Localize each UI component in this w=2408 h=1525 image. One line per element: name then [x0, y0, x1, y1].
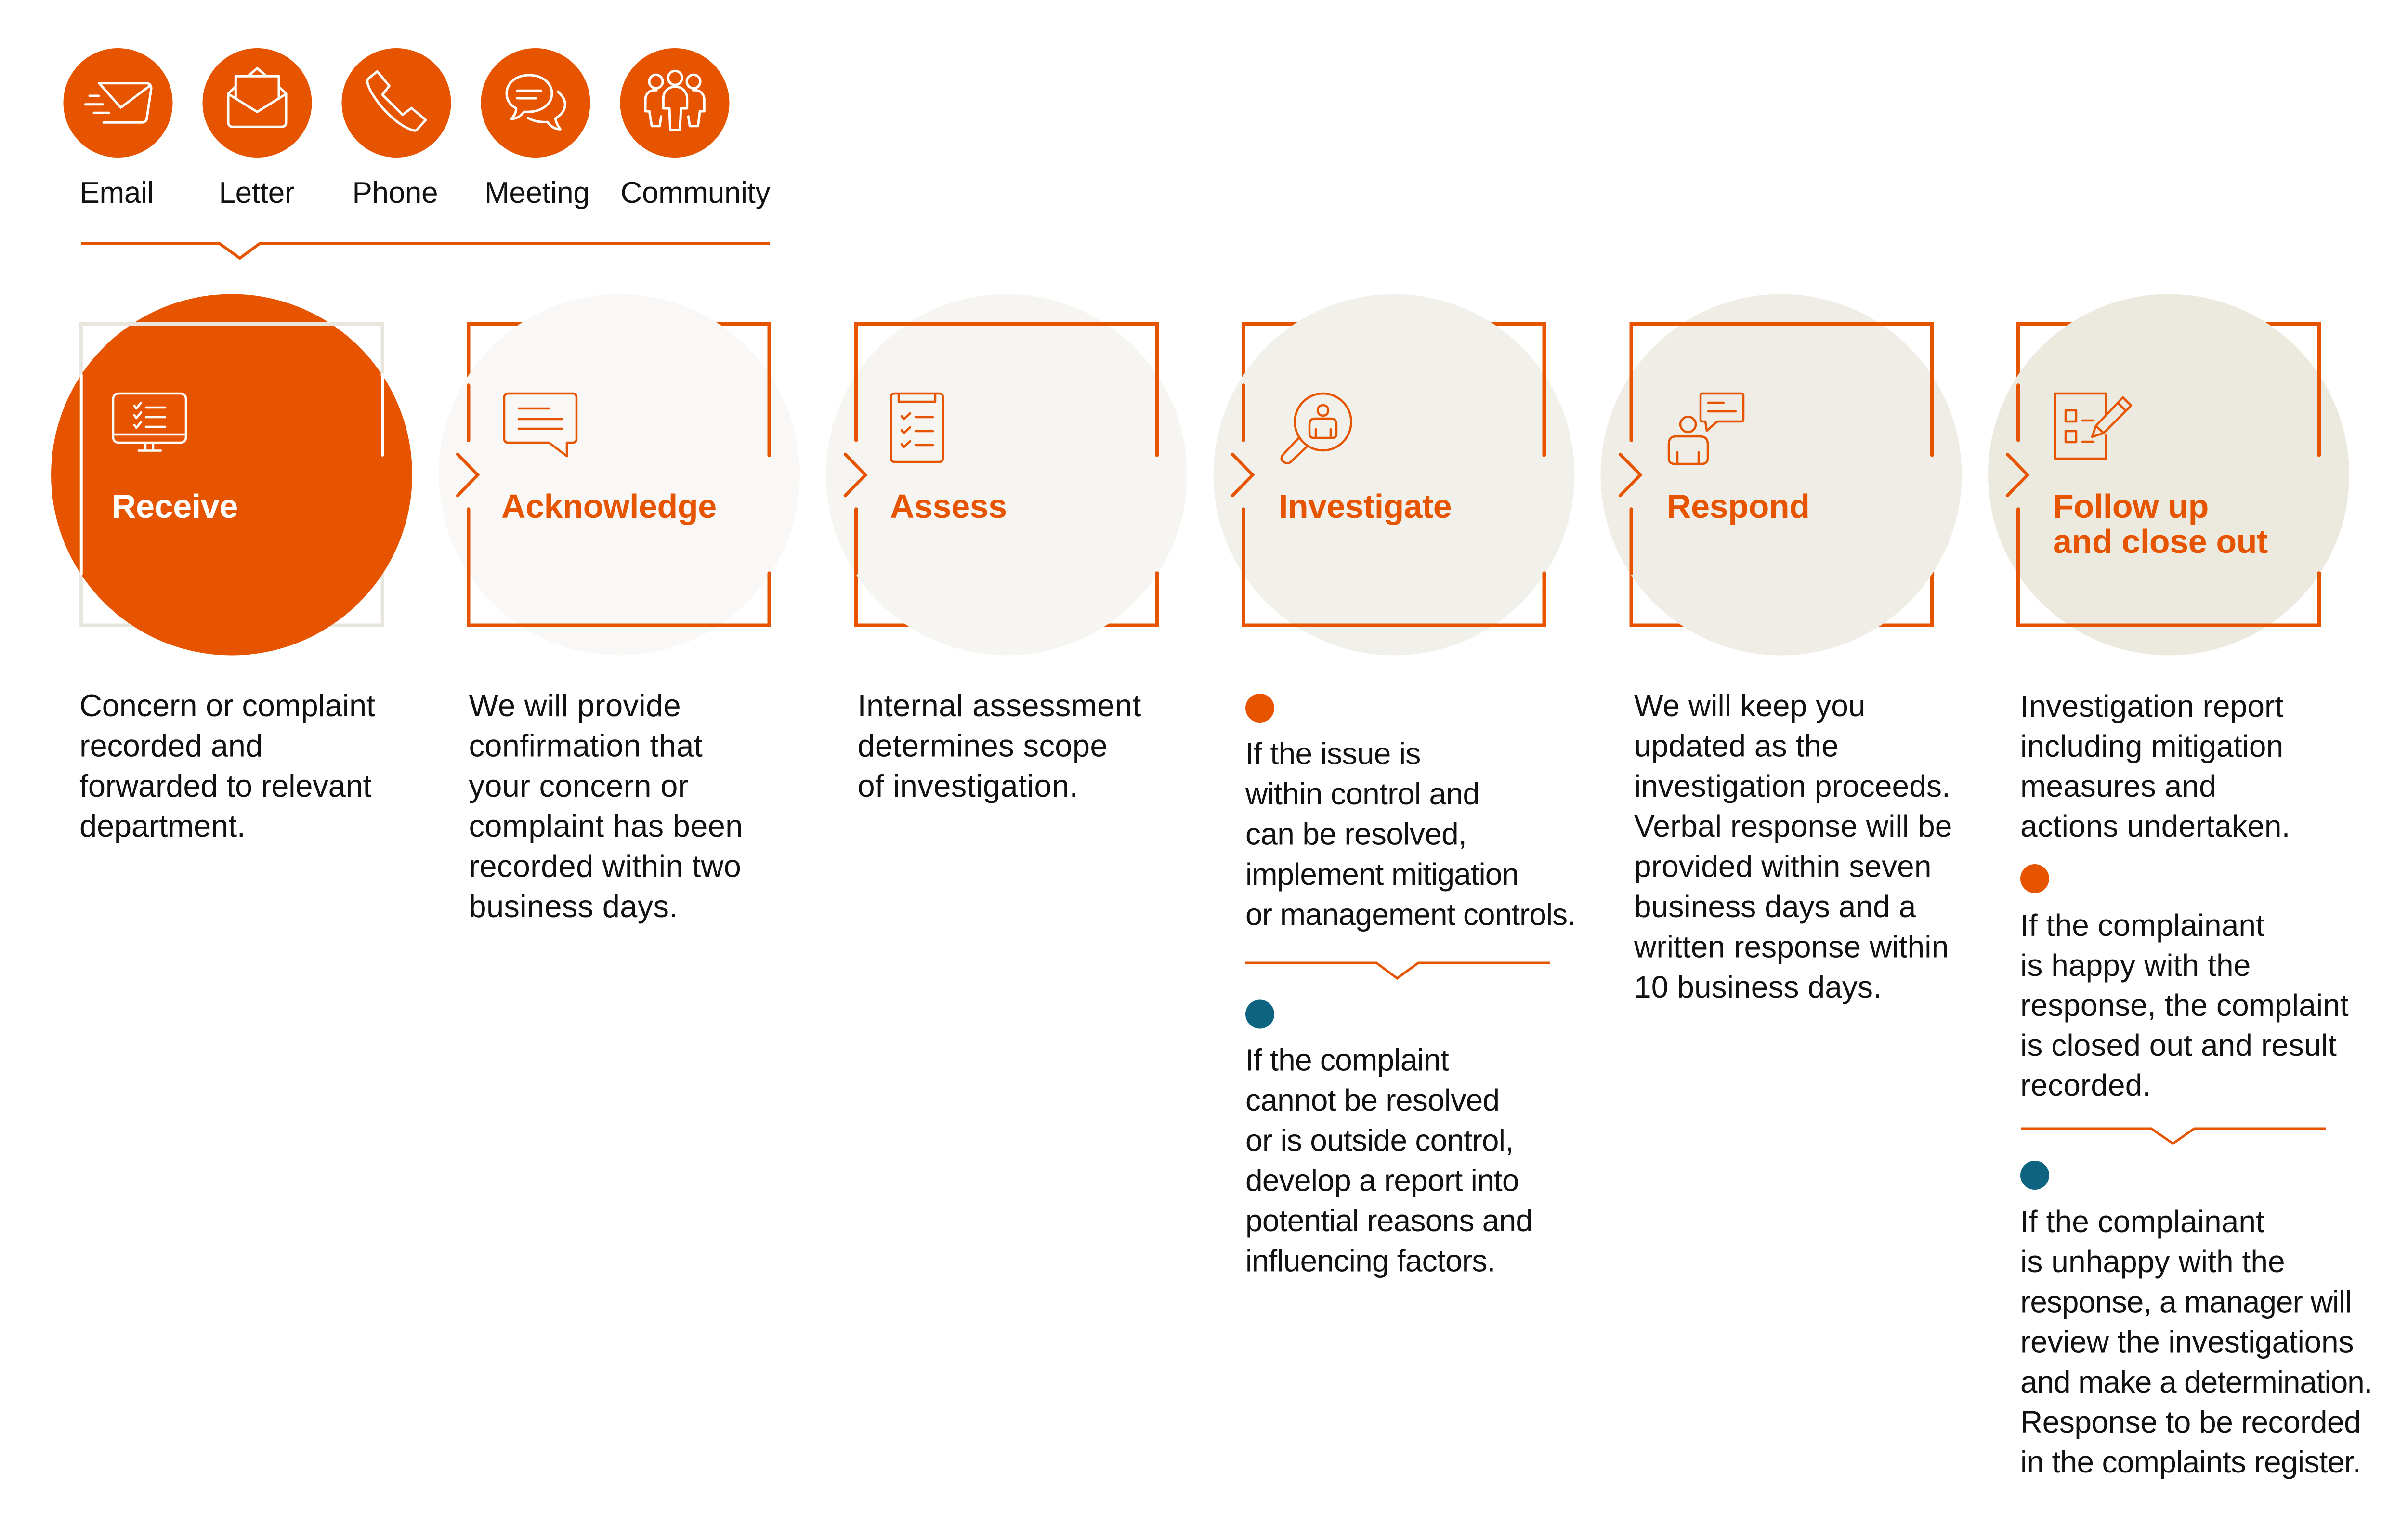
heading: receive: Receive — [112, 487, 238, 525]
dot: orange — [1245, 694, 1274, 723]
label: email: Email — [80, 176, 154, 210]
text: follow up intro: Investigation report — [2020, 689, 2283, 723]
text: acknowledge: confirmation that — [469, 728, 703, 763]
frame: investigate — [1243, 371, 1544, 625]
text: investigate branch 1 — [1245, 694, 1575, 932]
text: happy: If the complainant — [2020, 908, 2264, 943]
text: unhappy: and make a determination. — [2020, 1365, 2372, 1399]
panel: investigate — [1214, 294, 1575, 655]
icon: letter — [202, 48, 312, 158]
text: respond: investigation proceeds. — [1634, 769, 1950, 803]
heading: investigate: Investigate — [1279, 487, 1452, 525]
frame: follow up — [2018, 371, 2319, 625]
text: receive: department. — [79, 808, 246, 843]
icon: monitor checklist — [113, 394, 186, 451]
frame: respond — [1631, 324, 1932, 573]
text: resolved: within control and — [1245, 776, 1479, 811]
text: unresolved: or is outside control, — [1245, 1123, 1513, 1157]
icon: person with bubble — [1669, 394, 1743, 464]
heading: follow up: Follow up — [2053, 487, 2209, 525]
text: resolved: or management controls. — [1245, 897, 1575, 932]
text: respond: updated as the — [1634, 728, 1839, 763]
text: acknowledge: your concern or — [469, 768, 689, 803]
heading: acknowledge: Acknowledge — [501, 487, 717, 525]
frame: assess — [856, 324, 1157, 625]
icon: checklist and pencil — [2055, 394, 2131, 459]
text: respond: 10 business days. — [1634, 970, 1882, 1004]
text: follow up intro: actions undertaken. — [2020, 809, 2290, 843]
text: acknowledge: business days. — [469, 889, 678, 924]
arrow: investigate — [1232, 454, 1253, 496]
arrow: follow up — [2007, 454, 2028, 496]
divider: follow up — [2021, 1129, 2326, 1144]
text: happy: response, the complaint — [2020, 988, 2349, 1023]
text: investigate branch 2 — [1245, 1000, 1532, 1278]
text: follow up intro: measures and — [2020, 769, 2216, 803]
text: happy: is closed out and result — [2020, 1028, 2337, 1063]
label: phone: Phone — [353, 176, 438, 210]
text: resolved: If the issue is — [1245, 736, 1421, 771]
text: happy: is happy with the — [2020, 948, 2251, 983]
channels bracket — [81, 243, 770, 258]
text: unhappy: review the investigations — [2020, 1325, 2354, 1359]
heading: follow up: and close out — [2053, 523, 2268, 560]
dot: teal — [1245, 1000, 1274, 1029]
dot: orange — [2020, 864, 2049, 893]
circle: receive — [51, 294, 412, 655]
text: follow up branch 2 — [2020, 1161, 2372, 1479]
text: unresolved: develop a report into — [1245, 1163, 1519, 1198]
text: unresolved: influencing factors. — [1245, 1244, 1495, 1278]
icon: magnifier person — [1282, 394, 1351, 463]
text: unhappy: in the complaints register. — [2020, 1445, 2361, 1479]
text: assess: determines scope — [857, 728, 1108, 763]
text: respond: written response within — [1634, 929, 1949, 964]
label: letter: Letter — [219, 176, 294, 210]
circle: follow up — [1988, 294, 2349, 655]
dot: teal — [2020, 1161, 2049, 1190]
text: receive: Concern or complaint — [79, 688, 375, 723]
circle: acknowledge — [439, 294, 800, 655]
icon: speech bubble — [504, 394, 576, 456]
text: unhappy: Response to be recorded — [2020, 1405, 2361, 1439]
icon: community — [620, 48, 729, 158]
text: follow up intro: including mitigation — [2020, 729, 2283, 763]
text: unhappy: is unhappy with the — [2020, 1244, 2285, 1279]
text: respond: provided within seven — [1634, 849, 1932, 884]
text: assess: Internal assessment — [857, 688, 1141, 723]
text: acknowledge: recorded within two — [469, 849, 741, 884]
text: happy: recorded. — [2020, 1068, 2151, 1103]
label: community: Community — [620, 176, 771, 210]
text: unresolved: If the complaint — [1245, 1042, 1449, 1077]
text: respond: business days and a — [1634, 889, 1916, 924]
text: respond: We will keep you — [1634, 688, 1866, 723]
divider: investigate — [1245, 963, 1550, 978]
text: receive: recorded and — [79, 728, 263, 763]
heading: respond: Respond — [1667, 487, 1810, 525]
text: assess: of investigation. — [857, 768, 1078, 803]
panel: respond — [1601, 294, 1962, 655]
text: respond: Verbal response will be — [1634, 809, 1952, 843]
text: resolved: implement mitigation — [1245, 857, 1518, 892]
panel: acknowledge — [439, 294, 800, 655]
channels row — [64, 48, 771, 258]
arrow: respond — [1620, 454, 1640, 496]
frame: receive — [79, 324, 384, 376]
label: meeting: Meeting — [484, 176, 589, 210]
text: unhappy: response, a manager will — [2020, 1284, 2351, 1319]
icon: meeting — [481, 48, 590, 158]
icon: clipboard — [891, 394, 943, 462]
text: resolved: can be resolved, — [1245, 817, 1466, 852]
icon: email — [64, 48, 172, 158]
circle: investigate — [1214, 294, 1575, 655]
heading: assess: Assess — [890, 487, 1007, 525]
circle: assess — [826, 294, 1187, 655]
arrow: assess — [845, 454, 865, 496]
text: receive: forwarded to relevant — [79, 768, 372, 803]
panel: follow up — [1988, 294, 2349, 655]
panel: receive — [51, 294, 412, 655]
text: acknowledge: We will provide — [469, 688, 681, 723]
text: acknowledge: complaint has been — [469, 808, 743, 843]
text: unresolved: potential reasons and — [1245, 1203, 1532, 1238]
text: unresolved: cannot be resolved — [1245, 1083, 1499, 1117]
text: unhappy: If the complainant — [2020, 1204, 2264, 1239]
icon: phone — [342, 48, 451, 158]
arrow: acknowledge — [458, 454, 478, 496]
text: follow up branch 1 — [2020, 864, 2349, 1103]
panel: assess — [826, 294, 1187, 655]
circle: respond — [1601, 294, 1962, 655]
frame: acknowledge — [469, 371, 769, 625]
